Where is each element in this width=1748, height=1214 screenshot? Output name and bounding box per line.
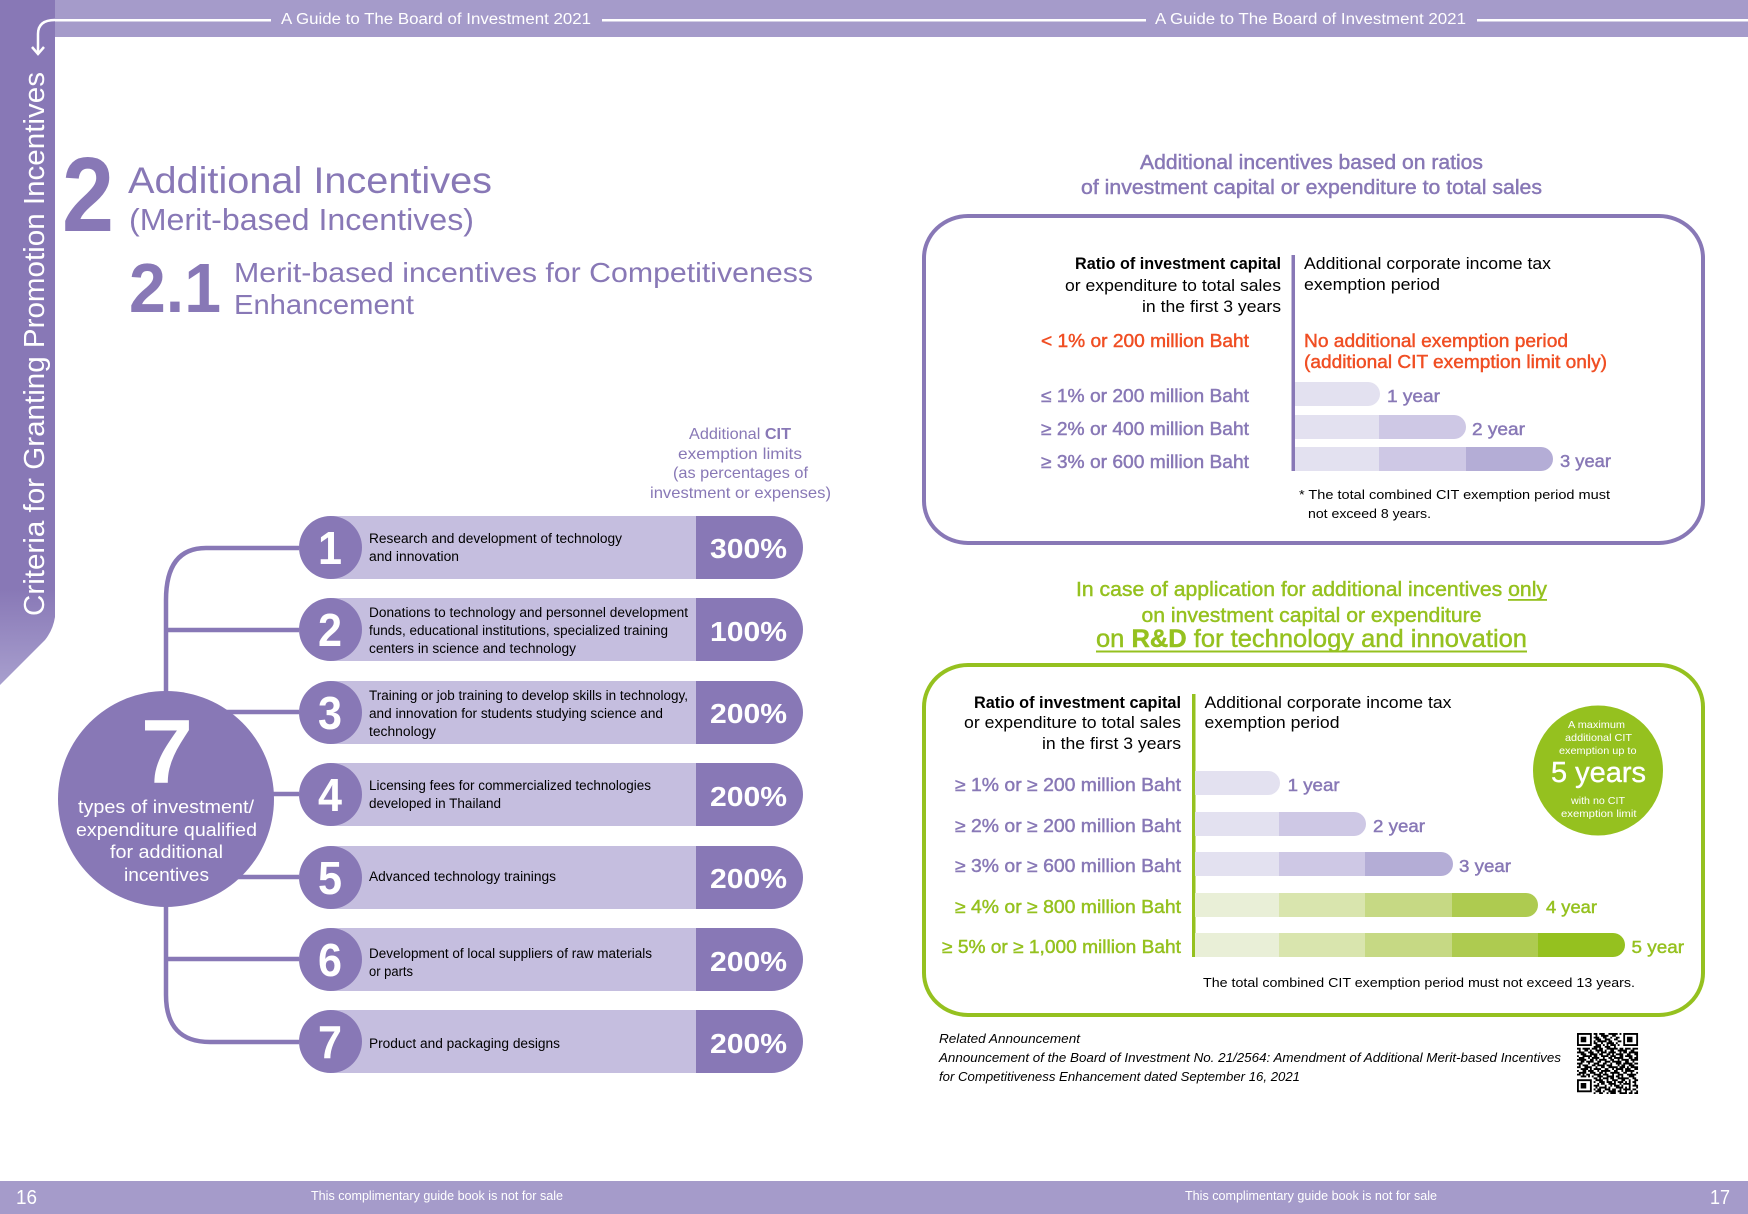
row 5 bbox=[299, 846, 803, 909]
heading: ratio incentives bbox=[1081, 152, 1542, 199]
panel: ratio incentives: 2 year bbox=[1472, 419, 1525, 439]
row 4: developed in Thailand bbox=[369, 796, 501, 811]
row 3: 200% bbox=[710, 698, 787, 729]
related announcement: Announcement of the Board of Investment No. 21/2564: Amendment of Additional Merit-based Incentives bbox=[938, 1050, 1562, 1065]
subtitle: section 2.1 bbox=[129, 249, 813, 327]
footer bar: This complimentary guide book is not for sale bbox=[311, 1189, 563, 1203]
panel: R&D incentives: Additional corporate income tax bbox=[1204, 693, 1452, 712]
callout: 5 years: 5 years bbox=[1551, 757, 1646, 789]
panel: ratio incentives: Additional corporate income tax bbox=[1304, 254, 1552, 273]
column heading: CIT exemption limits: Additional CIT bbox=[689, 426, 791, 443]
row 4 bbox=[299, 763, 803, 826]
callout: 5 years: exemption limit bbox=[1561, 808, 1637, 820]
callout: 5 years: A maximum bbox=[1568, 719, 1625, 731]
panel: R&D incentives: 3 year bbox=[1459, 856, 1511, 876]
callout: 5 years: additional CIT bbox=[1565, 732, 1633, 744]
row 2: centers in science and technology bbox=[369, 641, 576, 656]
panel: ratio incentives: 3 year bbox=[1560, 451, 1611, 471]
panel: ratio incentives: No additional exemption period bbox=[1304, 331, 1568, 351]
panel: ratio incentives: exemption period bbox=[1304, 275, 1440, 294]
icon: return arrow bbox=[32, 20, 55, 54]
row 5: 5 bbox=[318, 852, 342, 904]
panel: R&D incentives: ≥ 2% or ≥ 200 million Baht bbox=[955, 816, 1181, 836]
footer bar: This complimentary guide book is not for sale bbox=[1185, 1189, 1437, 1203]
panel: R&D incentives: 2 year bbox=[1373, 816, 1425, 836]
row 7: Product and packaging designs bbox=[369, 1036, 560, 1051]
row 5: Advanced technology trainings bbox=[369, 869, 556, 884]
row 7: 7 bbox=[318, 1016, 342, 1068]
row 6 bbox=[299, 928, 803, 991]
row 6: 200% bbox=[710, 946, 787, 977]
row 2: 100% bbox=[710, 616, 787, 647]
callout: 5 years bbox=[1533, 706, 1663, 836]
row 2 bbox=[299, 598, 803, 661]
panel: ratio incentives: 1 year bbox=[1387, 386, 1440, 406]
heading: R&D incentives: In case of application for additional incentives only bbox=[1076, 578, 1548, 601]
panel: ratio incentives: (additional CIT exemption limit only) bbox=[1304, 352, 1607, 372]
panel: R&D incentives: ≥ 4% or ≥ 800 million Baht bbox=[955, 897, 1181, 917]
related announcement bbox=[938, 1031, 1562, 1084]
heading: R&D incentives bbox=[1076, 578, 1548, 653]
circle: 7 types: 7 bbox=[141, 702, 193, 803]
callout: 5 years: with no CIT bbox=[1570, 795, 1626, 807]
title: section 2: (Merit-based Incentives) bbox=[129, 202, 474, 237]
column heading: CIT exemption limits bbox=[650, 426, 831, 502]
header bar: A Guide to The Board of Investment 2021 bbox=[281, 11, 591, 28]
panel: R&D incentives: 5 year bbox=[1632, 937, 1684, 957]
sidebar tab: Criteria for Granting Promotion Incentives bbox=[19, 72, 51, 616]
panel: ratio incentives: or expenditure to total sales bbox=[1065, 276, 1281, 295]
panel: R&D incentives: exemption period bbox=[1204, 713, 1340, 732]
row 1: Research and development of technology bbox=[369, 531, 622, 546]
header bar: A Guide to The Board of Investment 2021 bbox=[1155, 11, 1466, 28]
connector lines bbox=[166, 548, 299, 1042]
header bar bbox=[55, 0, 1748, 37]
column heading: CIT exemption limits: investment or expenses) bbox=[650, 485, 831, 502]
panel: R&D incentives bbox=[924, 665, 1703, 1015]
heading: ratio incentives: of investment capital or expenditure to total sales bbox=[1081, 177, 1542, 199]
related announcement: Related Announcement bbox=[939, 1031, 1081, 1046]
row 6: or parts bbox=[369, 964, 413, 979]
circle: 7 types bbox=[58, 691, 274, 907]
heading: R&D incentives: on investment capital or expenditure bbox=[1142, 604, 1482, 627]
subtitle: section 2.1: Enhancement bbox=[234, 289, 414, 320]
circle: 7 types: for additional bbox=[110, 841, 223, 862]
panel: R&D incentives: Ratio of investment capital bbox=[974, 693, 1181, 712]
sidebar tab bbox=[0, 0, 55, 685]
panel: R&D incentives: in the first 3 years bbox=[1042, 734, 1181, 753]
row 2: Donations to technology and personnel development bbox=[369, 605, 688, 620]
circle: 7 types: expenditure qualified bbox=[76, 819, 257, 840]
row 3: and innovation for students studying science and bbox=[369, 706, 663, 721]
circle: 7 types: incentives bbox=[124, 864, 209, 885]
icon: QR code bbox=[1577, 1033, 1638, 1094]
panel: R&D incentives: 1 year bbox=[1288, 775, 1340, 795]
row 4: Licensing fees for commercialized technologies bbox=[369, 778, 651, 793]
title: section 2: 2 bbox=[62, 136, 114, 254]
subtitle: section 2.1: Merit-based incentives for Competitiveness bbox=[234, 257, 813, 288]
title: section 2 bbox=[62, 136, 492, 254]
footer bar: 16 bbox=[16, 1187, 37, 1209]
row 1: 300% bbox=[710, 533, 787, 564]
panel: ratio incentives: Ratio of investment capital bbox=[1075, 254, 1281, 273]
circle: 7 types: types of investment/ bbox=[78, 796, 255, 817]
panel: ratio incentives: ≤ 1% or 200 million Baht bbox=[1041, 386, 1249, 406]
row 3: 3 bbox=[318, 687, 342, 739]
row 3: technology bbox=[369, 724, 436, 739]
row 4: 200% bbox=[710, 781, 787, 812]
heading: ratio incentives: Additional incentives based on ratios bbox=[1140, 152, 1483, 174]
panel: ratio incentives: < 1% or 200 million Baht bbox=[1041, 331, 1249, 351]
footer bar bbox=[0, 1181, 1748, 1214]
panel: R&D incentives: ≥ 3% or ≥ 600 million Baht bbox=[955, 856, 1181, 876]
panel: R&D incentives: The total combined CIT exemption period must not exceed 13 years. bbox=[1203, 975, 1635, 990]
panel: ratio incentives: not exceed 8 years. bbox=[1308, 506, 1431, 521]
panel: R&D incentives: 4 year bbox=[1546, 897, 1597, 917]
callout: 5 years: exemption up to bbox=[1559, 745, 1637, 757]
panel: R&D incentives: or expenditure to total sales bbox=[964, 713, 1181, 732]
panel: ratio incentives: ≥ 2% or 400 million Baht bbox=[1041, 419, 1249, 439]
row 1: and innovation bbox=[369, 549, 459, 564]
row 4: 4 bbox=[318, 769, 342, 821]
row 7: 200% bbox=[710, 1028, 787, 1059]
row 3: Training or job training to develop skills in technology, bbox=[369, 688, 688, 703]
panel: ratio incentives bbox=[924, 216, 1703, 543]
title: section 2: Additional Incentives bbox=[128, 160, 492, 201]
row 3 bbox=[299, 681, 803, 744]
panel: ratio incentives: in the first 3 years bbox=[1142, 297, 1281, 316]
row 2: funds, educational institutions, specialized training bbox=[369, 623, 668, 638]
heading: R&D incentives: on R&D for technology and innovation bbox=[1096, 625, 1527, 653]
row 5: 200% bbox=[710, 863, 787, 894]
column heading: CIT exemption limits: (as percentages of bbox=[673, 465, 809, 482]
row 2: 2 bbox=[318, 604, 342, 656]
panel: ratio incentives: * The total combined CIT exemption period must bbox=[1299, 487, 1610, 502]
row 6: Development of local suppliers of raw materials bbox=[369, 946, 652, 961]
related announcement: for Competitiveness Enhancement dated September 16, 2021 bbox=[939, 1069, 1300, 1084]
row 7 bbox=[299, 1010, 803, 1073]
subtitle: section 2.1: 2.1 bbox=[129, 249, 221, 327]
footer bar: 17 bbox=[1710, 1187, 1730, 1209]
panel: R&D incentives: ≥ 1% or ≥ 200 million Baht bbox=[955, 775, 1181, 795]
row 1 bbox=[299, 516, 803, 579]
row 1: 1 bbox=[318, 522, 342, 574]
panel: ratio incentives: ≥ 3% or 600 million Baht bbox=[1041, 452, 1249, 472]
column heading: CIT exemption limits: exemption limits bbox=[678, 446, 802, 463]
panel: R&D incentives: ≥ 5% or ≥ 1,000 million Baht bbox=[942, 937, 1181, 957]
row 6: 6 bbox=[318, 934, 342, 986]
